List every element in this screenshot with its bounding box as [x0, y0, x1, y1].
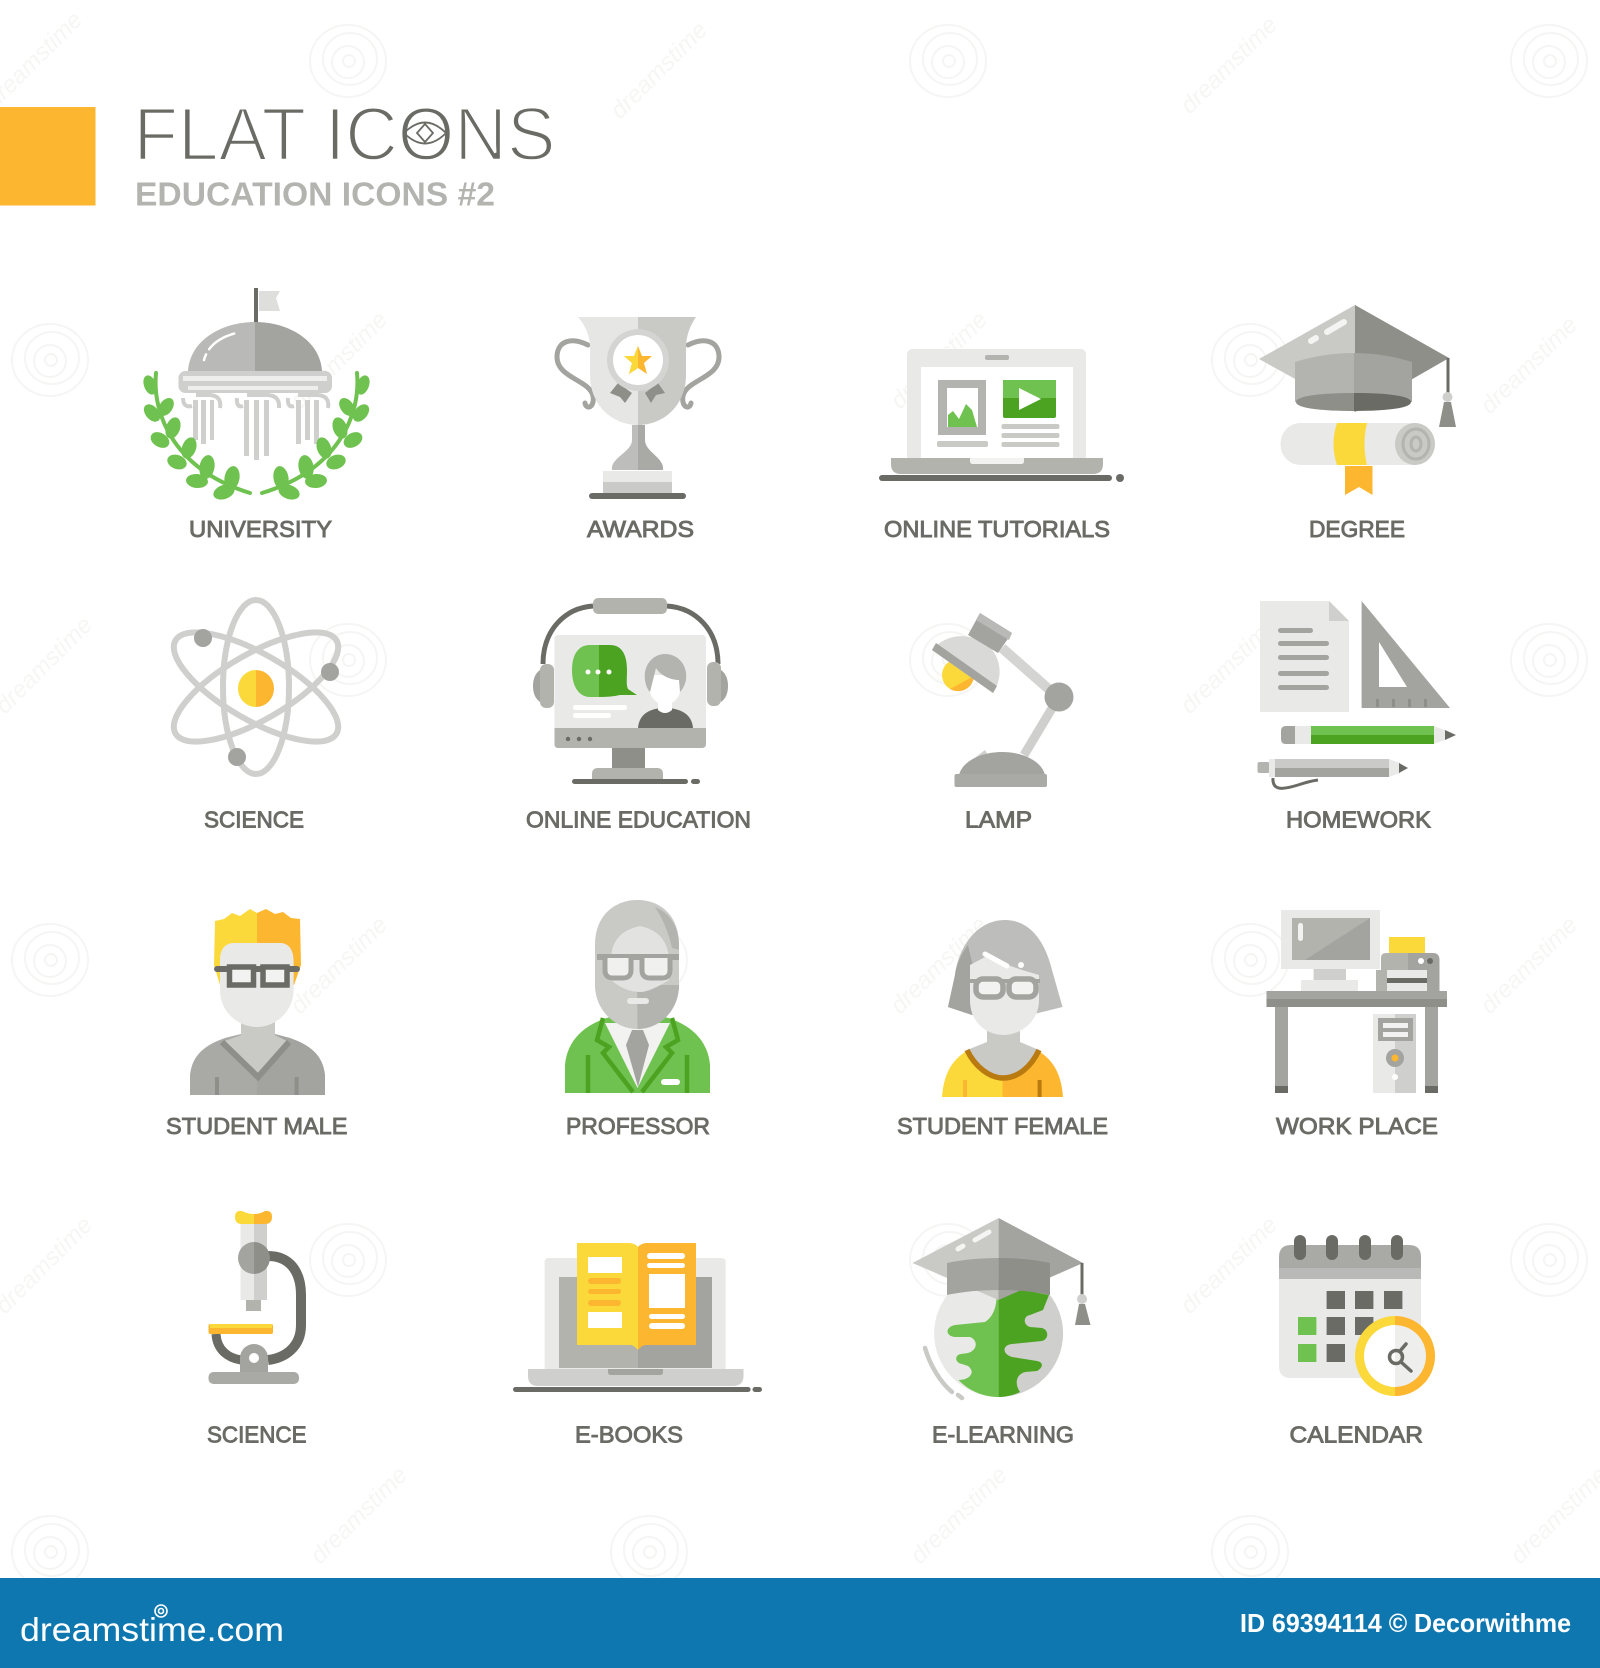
panel: science atom [159, 600, 353, 832]
watermark pattern: dreamstime [1175, 1211, 1283, 1319]
icon: atom [159, 600, 353, 774]
icon: laptop with video [879, 349, 1124, 482]
panel: professor [565, 900, 710, 1139]
label: LAMP [965, 806, 1032, 832]
icon: document, ruler, pencil and pen [1258, 601, 1456, 788]
label: E-LEARNING [932, 1422, 1074, 1448]
watermark pattern: dreamstime [885, 306, 993, 414]
icon: calendar with clock [1279, 1235, 1435, 1396]
watermark pattern: dreamstime [885, 911, 993, 1019]
label: ONLINE EDUCATION [526, 806, 751, 832]
label: ONLINE TUTORIALS [884, 516, 1110, 542]
panel: work place [1266, 910, 1447, 1139]
icon: monitor with headset [533, 598, 728, 784]
watermark pattern: dreamstime [285, 911, 393, 1019]
icon: student male avatar [190, 909, 325, 1095]
icon: eye in letter O [404, 122, 446, 144]
icon: microscope [208, 1211, 301, 1384]
watermark pattern: dreamstime [285, 306, 393, 414]
panel: awards [557, 317, 719, 542]
icon: globe with graduation cap [912, 1218, 1090, 1398]
watermark pattern: dreamstime [605, 16, 713, 124]
panel: university [141, 288, 372, 542]
panel: student female [897, 920, 1108, 1139]
footer logo: dreamstime.com [20, 1611, 284, 1648]
watermark pattern: dreamstime [305, 1461, 413, 1569]
label: AWARDS [587, 516, 694, 542]
panel: e-learning [912, 1218, 1090, 1448]
title: FLAT ICONS [134, 92, 556, 176]
watermark pattern: dreamstime [1175, 611, 1283, 719]
watermark pattern: dreamstime [905, 1461, 1013, 1569]
panel: online tutorials [879, 349, 1124, 542]
label: CALENDAR [1290, 1422, 1423, 1448]
label: UNIVERSITY [189, 516, 332, 542]
icon: student female avatar [942, 920, 1063, 1097]
icon: university dome and laurel [141, 288, 372, 502]
panel: homework [1258, 601, 1456, 832]
icon: graduation cap and scroll [1259, 305, 1456, 495]
panel: lamp [932, 613, 1074, 832]
image credit: ID 69394114 © Decorwithme [1240, 1608, 1571, 1638]
label: DEGREE [1309, 516, 1405, 542]
icon: desk with computer and printer [1266, 910, 1447, 1093]
label: SCIENCE [204, 806, 304, 832]
panel: calendar [1279, 1235, 1435, 1448]
panel: e-books [513, 1243, 762, 1448]
icon: logo swirl [155, 1605, 167, 1617]
watermark pattern: dreamstime [1175, 11, 1283, 119]
watermark pattern: dreamstime [1475, 911, 1583, 1019]
label: WORK PLACE [1276, 1113, 1438, 1139]
label: SCIENCE [207, 1422, 306, 1448]
icon: professor avatar [565, 900, 710, 1093]
subtitle: EDUCATION ICONS #2 [135, 176, 495, 212]
label: STUDENT MALE [166, 1113, 348, 1139]
label: PROFESSOR [566, 1113, 710, 1139]
label: STUDENT FEMALE [897, 1113, 1108, 1139]
watermark pattern: dreamstime [1475, 311, 1583, 419]
icon: trophy [557, 317, 719, 499]
footer bar [0, 1578, 1600, 1668]
icon: laptop with open book [513, 1243, 762, 1392]
orange header square [0, 107, 96, 206]
panel: degree [1259, 305, 1456, 542]
label: E-BOOKS [575, 1422, 683, 1448]
panel: student male [166, 909, 348, 1139]
panel: science microscope [207, 1211, 306, 1448]
label: HOMEWORK [1286, 806, 1432, 832]
panel: online education [526, 598, 751, 832]
icon: desk lamp [932, 613, 1074, 787]
